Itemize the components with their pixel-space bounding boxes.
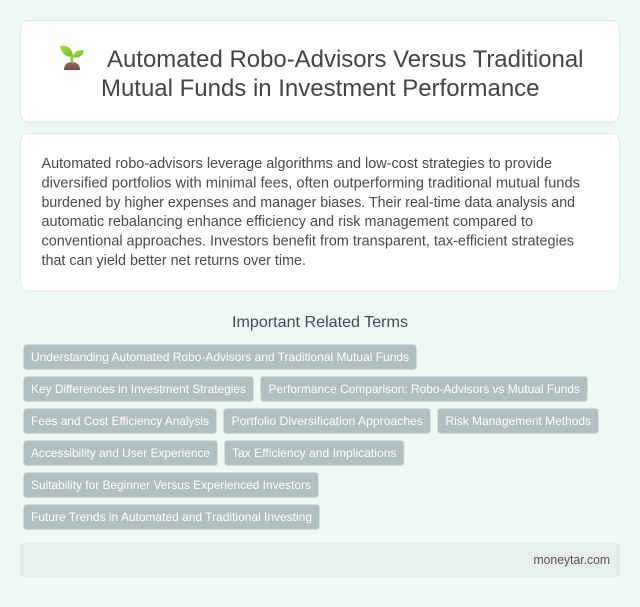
chip: tax efficiency: Tax Efficiency and Implications (232, 446, 396, 460)
chip: tax efficiency (224, 440, 404, 466)
chip: accessibility (24, 440, 218, 466)
chip: future trends: Future Trends in Automated and Traditional Investing (31, 510, 312, 524)
chip: understanding (24, 344, 416, 370)
chip: accessibility: Accessibility and User Experience (31, 446, 210, 460)
chip: risk management (438, 408, 598, 434)
chip: fees (24, 408, 216, 434)
title (101, 46, 584, 102)
footer: moneytar.com (534, 552, 610, 567)
chip: fees: Fees and Cost Efficiency Analysis (31, 414, 209, 428)
text block: summary: conventional approaches. Investors benefit from transparent, tax-efficient strategies (42, 234, 574, 250)
text block: summary: burdened by higher expenses and manager biases. Their real-time data analysis and (42, 195, 575, 211)
footer (20, 543, 620, 577)
chip: performance comparison: Performance Comparison: Robo-Advisors vs Mutual Funds (268, 382, 580, 396)
panel: summary card (20, 134, 620, 291)
title: Mutual Funds in Investment Performance (101, 75, 540, 102)
text block: summary: Automated robo-advisors leverage algorithms and low-cost strategies to provide (42, 156, 552, 172)
chip: key differences (24, 376, 254, 402)
chip: suitability: Suitability for Beginner Versus Experienced Investors (31, 478, 311, 492)
chip: diversification: Portfolio Diversification Approaches (232, 414, 423, 428)
icon: seedling (60, 46, 84, 70)
panel: related term chips (24, 344, 598, 530)
title: Automated Robo-Advisors Versus Traditional (107, 46, 584, 73)
chip: understanding: Understanding Automated Robo-Advisors and Traditional Mutual Funds (31, 350, 409, 364)
text block: summary: that can yield better net returns over time. (42, 253, 306, 269)
chip: suitability (24, 472, 318, 498)
text block: summary: diversified portfolios with minimal fees, often outperforming traditional mutual funds (42, 176, 580, 192)
text block: summary (42, 156, 580, 269)
chip: future trends (24, 504, 320, 530)
chip: key differences: Key Differences in Investment Strategies (31, 382, 246, 396)
panel: title card (20, 20, 620, 122)
heading: related terms: Important Related Terms (232, 314, 408, 331)
text block: summary: automatic rebalancing enhance efficiency and risk management compared to (42, 214, 533, 230)
chip: performance comparison (260, 376, 588, 402)
chip: diversification (224, 408, 430, 434)
chip: risk management: Risk Management Methods (446, 414, 591, 428)
